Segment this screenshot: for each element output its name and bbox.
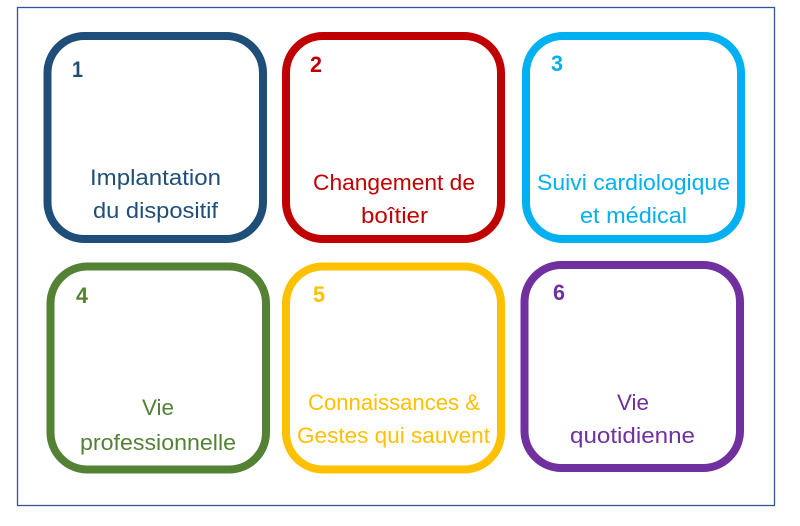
panel 3: suivi cardiologique et medical bbox=[526, 36, 741, 239]
label: changement de boitier: boîtier bbox=[361, 203, 429, 228]
number 4: 4 bbox=[76, 283, 89, 308]
label: vie quotidienne: quotidienne bbox=[570, 423, 695, 448]
number 5: 5 bbox=[313, 282, 325, 307]
panel 1: implantation du dispositif bbox=[48, 36, 263, 239]
number 6: 6 bbox=[553, 280, 565, 305]
label: vie quotidienne: Vie bbox=[617, 390, 649, 415]
number 3: 3 bbox=[551, 51, 563, 76]
label: vie professionnelle: Vie bbox=[142, 395, 174, 420]
label: suivi cardiologique et medical: Suivi cardiologique bbox=[537, 170, 730, 195]
label: suivi cardiologique et medical: et médical bbox=[580, 203, 687, 228]
label: changement de boitier: Changement de bbox=[313, 170, 475, 195]
label: vie professionnelle: professionnelle bbox=[80, 430, 236, 455]
label: connaissances et gestes qui sauvent: Gestes qui sauvent bbox=[297, 423, 491, 448]
panel 4: vie professionnelle bbox=[50, 266, 266, 470]
panel 5: connaissances et gestes qui sauvent bbox=[286, 266, 501, 470]
panel 2: changement de boitier bbox=[286, 36, 501, 239]
label: implantation du dispositif: du dispositif bbox=[93, 198, 219, 223]
number 1: 1 bbox=[72, 57, 83, 82]
panel 6: vie quotidienne bbox=[524, 265, 740, 468]
label: implantation du dispositif: Implantation bbox=[90, 165, 221, 190]
number 2: 2 bbox=[310, 52, 322, 77]
label: connaissances et gestes qui sauvent: Connaissances & bbox=[308, 390, 480, 415]
